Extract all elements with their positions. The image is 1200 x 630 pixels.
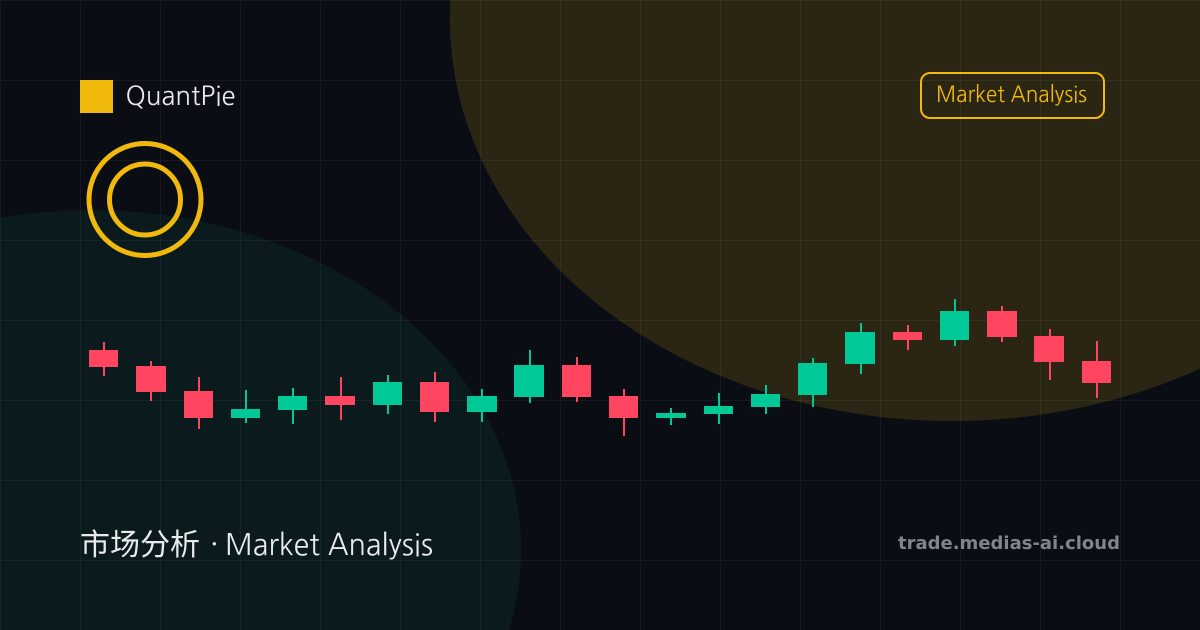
background shape: yellow ellipse: [450, 0, 1200, 421]
candlestick chart: [89, 299, 1111, 436]
title: 市场分析: [80, 529, 200, 560]
badge: Market Analysis: [921, 73, 1104, 118]
title: Market Analysis: [225, 530, 433, 560]
icon: concentric rings: [89, 144, 201, 256]
badge: Market Analysis: Market Analysis: [936, 84, 1087, 106]
title: ·: [210, 530, 219, 560]
site url: trade.medias-ai.cloud: [898, 533, 1120, 554]
background shape: teal ellipse: [0, 210, 521, 630]
brand name: QuantPie: [126, 83, 236, 109]
logo mark: [80, 80, 113, 113]
